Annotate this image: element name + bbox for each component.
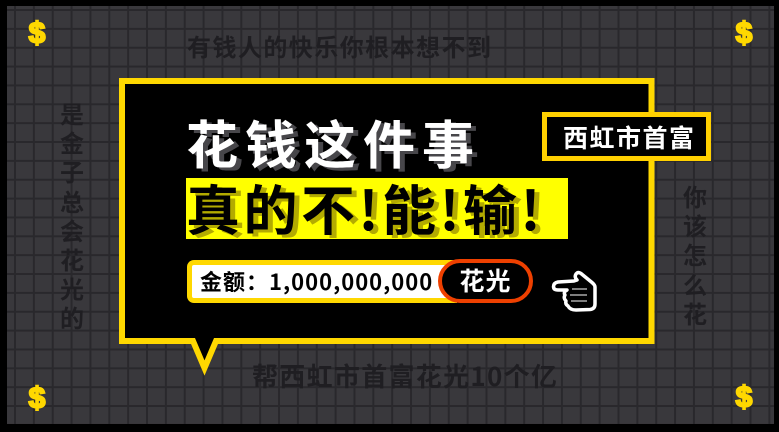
- button: spend all: [438, 259, 533, 303]
- tag text: 西虹市首富: [563, 119, 696, 155]
- button text: 花光: [459, 262, 512, 298]
- tag: name label: [542, 112, 711, 161]
- text: right vertical slogan: 你该怎么花: [683, 178, 707, 330]
- title: second line: 真的不!能!输!: [186, 167, 544, 246]
- heading: top background slogan: 有钱人的快乐你根本想不到: [187, 28, 492, 63]
- icon: dollar top right: $: [736, 17, 752, 50]
- text: left vertical slogan: 是金子总会花光的: [60, 95, 84, 334]
- icon: dollar top left: $: [29, 17, 45, 50]
- title: first line: 花钱这件事: [186, 104, 481, 179]
- icon: dollar bottom left: $: [29, 382, 45, 415]
- highlight bar with title second line: [186, 178, 568, 239]
- heading: bottom background slogan: 帮西虹市首富花光10个亿: [252, 357, 558, 394]
- icon: dollar bottom right: $: [736, 381, 752, 414]
- amount text: 金额：1,000,000,000: [200, 265, 433, 297]
- icon: pointing hand: [552, 270, 597, 312]
- amount input field: [187, 260, 457, 303]
